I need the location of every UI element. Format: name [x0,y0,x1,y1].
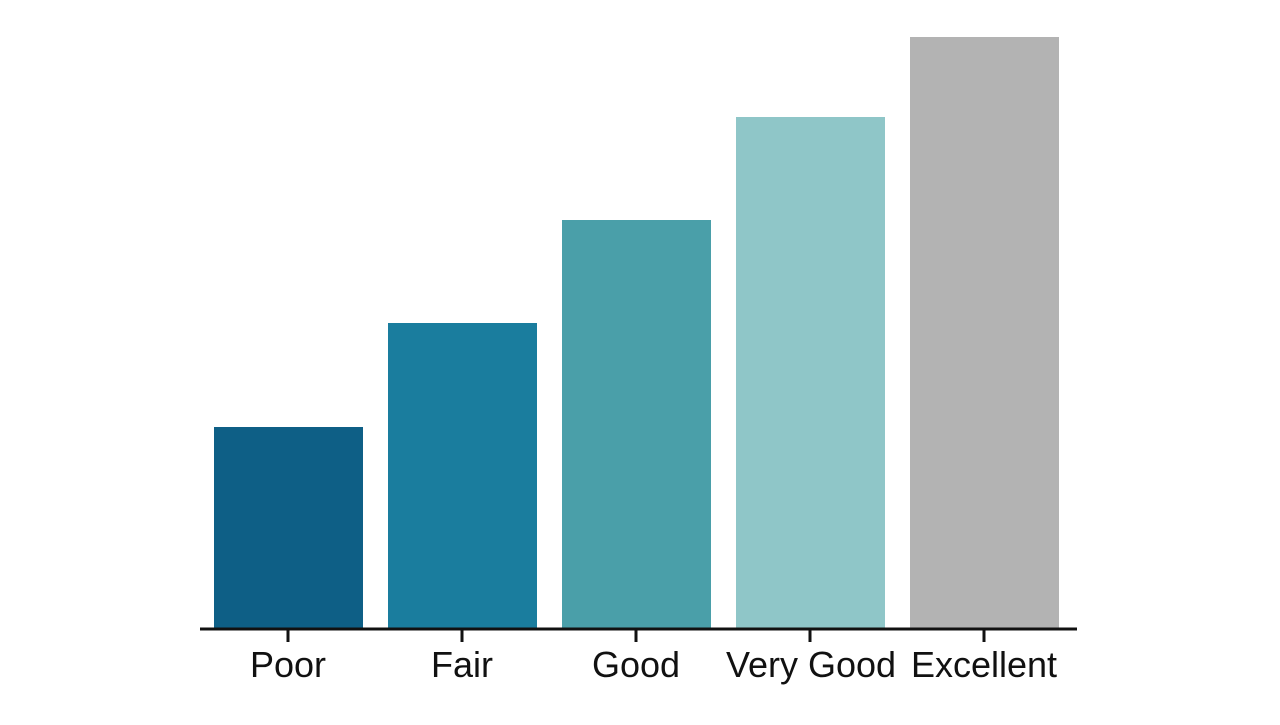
bar: Excellent [910,37,1059,629]
axis labels: Good [592,644,680,685]
axis labels: Poor [250,644,326,685]
axis labels: Fair [431,644,493,685]
bar: Fair [388,323,537,629]
bar: Good [562,220,711,629]
axis labels: Excellent [911,644,1057,685]
bar: Poor [214,427,363,629]
axis labels: Very Good [726,644,896,685]
x axis [200,629,1077,642]
bar: Very Good [736,117,885,629]
axis labels [250,644,1057,685]
